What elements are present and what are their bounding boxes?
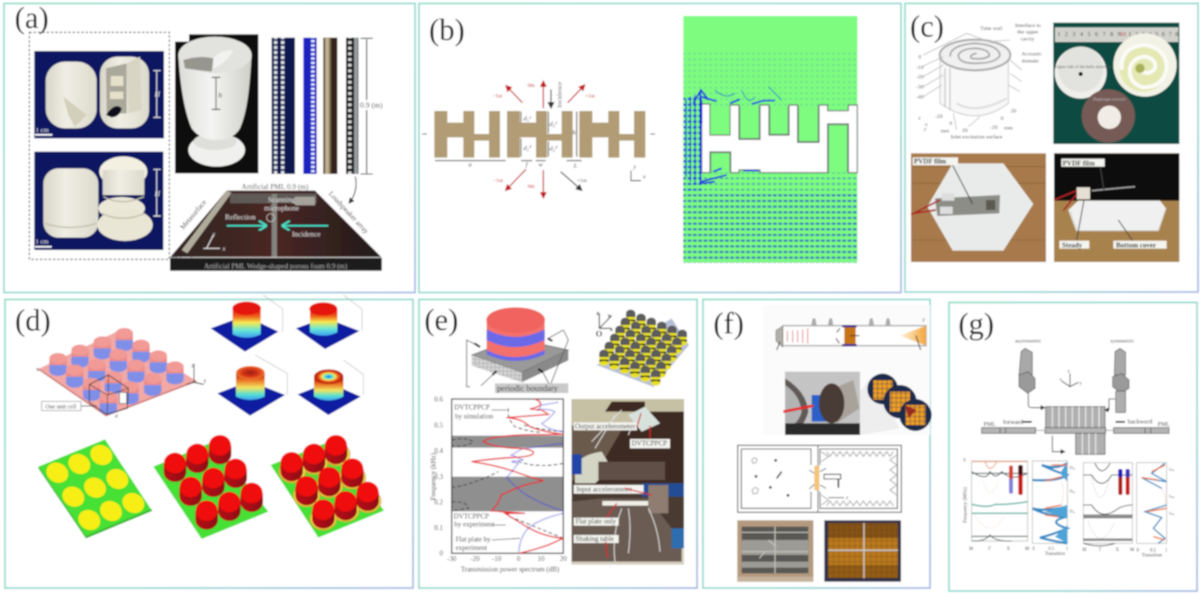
- dimension marks: [422, 112, 655, 169]
- label (a): (a): [15, 1, 49, 35]
- photo: stacked cylinder bottom: 1 cm: [35, 238, 49, 245]
- symmetric unit: [1105, 338, 1135, 413]
- photo: PVDF film side view: PVDF film: [1063, 159, 1095, 167]
- spiral schematic: mm: [1004, 125, 1013, 131]
- waveguide photo: Artificial PML 0.9 (m): [242, 182, 309, 191]
- transmission chart 2: 0.5: [1150, 549, 1156, 554]
- light background of figure: [763, 305, 930, 435]
- mode shape 3: [217, 355, 287, 416]
- mode shape 2: [296, 295, 362, 349]
- photo: PVDF film on hexagon: PVDF film: [914, 158, 946, 166]
- waveguide with resonator comb: backward: [1128, 419, 1153, 426]
- transmission chart 2: 1: [1165, 549, 1168, 554]
- chart labels: 10: [538, 555, 545, 563]
- band chart left: M: [969, 547, 973, 552]
- dimension marks: d₂ᵘ: [549, 121, 558, 128]
- dimension: 0.9 m: [359, 38, 385, 174]
- asymmetric unit: [1015, 338, 1044, 408]
- curves: [452, 399, 563, 553]
- spiral schematic: -40: [916, 95, 924, 101]
- mode shape 4: [298, 360, 363, 415]
- experiment photos: DVTCPPCP: [632, 440, 667, 448]
- diffraction arrows and order labels: 0th: [528, 83, 535, 89]
- spiral schematic: domain: [1022, 59, 1039, 65]
- grating cross section: [434, 111, 645, 158]
- experiment photos: Flat plate only: [576, 518, 617, 526]
- waveguide photo: Loudspeaker array: [327, 189, 371, 236]
- pink pillared plate: [36, 328, 206, 420]
- plate with red pillars: [153, 435, 268, 539]
- plate with red pillars and rings: [271, 435, 384, 538]
- photo: hollow cylinder top: [34, 51, 164, 138]
- label (d): (d): [15, 304, 51, 338]
- waveguide photo: [170, 182, 382, 271]
- dimension marks: a: [468, 162, 472, 169]
- chart labels: 0: [517, 555, 521, 563]
- label (f): (f): [713, 307, 744, 341]
- waveguide photo: Artificial PML Wedge-shaped porous foam 0.9 (m): [204, 262, 348, 270]
- axis y x: [631, 164, 646, 181]
- chart labels: -20: [470, 555, 480, 563]
- diffraction arrows and order labels: 0th: [528, 184, 535, 190]
- pink pillared plate: One unit cell: [45, 404, 77, 410]
- chart labels: Flat plate by: [456, 535, 491, 543]
- experiment photos: [572, 399, 684, 564]
- pink pillared plate: x: [36, 367, 39, 373]
- spiral schematic: [916, 22, 1042, 140]
- chart labels: 0.4: [434, 447, 444, 455]
- photo: hollow cylinder top: 1 cm: [36, 127, 50, 134]
- spiral schematic: mm: [941, 129, 950, 135]
- curved arrow from strip to waveguide photo: [349, 177, 356, 203]
- photo: white resonator cup: h: [218, 90, 222, 99]
- chamber photo right: [824, 520, 901, 582]
- strip photos: loudspeaker arrays: [272, 38, 358, 174]
- duct schematic: [776, 318, 926, 350]
- photo: spiral parts with ruler: Diaphragm structure: [1093, 97, 1126, 102]
- dimension marks: w: [538, 162, 543, 169]
- experiment photos: Shaking table: [576, 535, 614, 543]
- diffraction arrows and order labels: +1st: [585, 93, 595, 99]
- pink pillared plate: y: [203, 378, 206, 384]
- transmission chart 2: [1137, 463, 1175, 559]
- chart labels: 0.6: [434, 396, 444, 404]
- dimension marks: L: [573, 162, 578, 169]
- chart labels: DVTCPPCP: [454, 512, 489, 520]
- photo: spiral parts with ruler: Upper side of the helix structure: [1055, 64, 1111, 69]
- transmission chart 1: 0: [1032, 547, 1035, 552]
- chart labels: 0.3: [434, 473, 444, 481]
- array of yellow-black pillars: O: [596, 329, 603, 339]
- axis: z: [1068, 370, 1070, 375]
- transmission chart 2: fₛₑₐ: [1169, 510, 1175, 515]
- dimension: 0.9 m: 0.9 (m): [360, 101, 383, 110]
- chart labels: 0.1: [434, 524, 444, 532]
- spiral schematic: y: [923, 127, 927, 133]
- band chart left: 6: [963, 459, 966, 464]
- chart labels: 0.2: [434, 499, 444, 507]
- rig photo: [783, 372, 900, 435]
- transmission chart 2: fₛₑₐ: [1169, 494, 1175, 499]
- sample discs: [867, 374, 931, 431]
- chart labels: by experiment: [454, 521, 495, 529]
- duct schematic: z: [921, 318, 925, 324]
- photo: PVDF film on hexagon: [911, 153, 1046, 262]
- spiral schematic: -30: [916, 85, 924, 91]
- chart labels: -10: [492, 555, 502, 563]
- transmission chart 1: Dᵢ₂: [1070, 488, 1075, 493]
- band chart left: M: [1025, 547, 1029, 552]
- transmission chart 1: Dᵢ₁: [1070, 508, 1075, 513]
- axis: x: [1060, 378, 1063, 383]
- diffraction arrows and order labels: −1st: [492, 93, 503, 99]
- diffraction arrows and order labels: [492, 82, 595, 197]
- chamber photo left: [737, 520, 813, 582]
- transmission chart 2: 0: [1137, 549, 1140, 554]
- plate with yellow discs: [38, 439, 152, 538]
- axis: [1060, 370, 1082, 387]
- transmission chart 1: [1032, 461, 1075, 557]
- band chart right: [1082, 463, 1134, 553]
- spiral schematic: Tube wall: [980, 26, 1003, 32]
- label (c): (c): [910, 10, 944, 44]
- panel f: duct and chamber measurements: [703, 300, 931, 588]
- waveguide photo: Reflection: [225, 212, 256, 221]
- spiral schematic: 20: [962, 128, 968, 134]
- band chart right: M: [1130, 548, 1134, 553]
- meshed pillar unit cell: [467, 307, 568, 393]
- field plot: [683, 16, 857, 263]
- pink pillared plate: z: [191, 364, 194, 370]
- transmission chart 1: 1: [1066, 547, 1069, 552]
- asymmetric unit: asymmetric: [1015, 338, 1042, 344]
- spiral schematic: Interface to: [1015, 22, 1041, 29]
- chart labels: experiment: [456, 544, 487, 552]
- photo: spiral parts with ruler: 10: [1120, 32, 1126, 38]
- dimension marks: h: [572, 129, 576, 136]
- transmission chart 2: fₛₑₐ: [1169, 467, 1175, 472]
- axis y x: y: [632, 164, 636, 170]
- waveguide photo: microphone: [264, 204, 299, 213]
- diffraction arrows and order labels: Incidence: [557, 82, 564, 108]
- mode shape 1: [211, 295, 283, 352]
- spiral schematic: z: [917, 115, 921, 121]
- panel a: acoustic metasurface samples: [4, 1, 415, 292]
- chart labels: [430, 396, 567, 574]
- photo: stacked cylinder bottom: [34, 152, 163, 250]
- meshed pillar unit cell: periodic boundary: [497, 384, 559, 393]
- panel d: pillared plates and mode shapes: [5, 295, 413, 588]
- diffraction arrows and order labels: −1st: [493, 178, 503, 184]
- transmission chamber schematic: [738, 445, 901, 512]
- chart labels: 0.5: [434, 421, 444, 429]
- spiral schematic: -20: [935, 114, 943, 120]
- photo: spiral parts with ruler: 1 2 3 4 5 6 7 8 9: [1057, 32, 1121, 38]
- dashed box around unit cell photos: [29, 32, 169, 259]
- panel c: spiral resonator and PVDF photos: [905, 4, 1198, 292]
- label (b): (b): [429, 13, 465, 47]
- axis y x: x: [642, 174, 646, 180]
- spiral schematic: 0: [918, 55, 921, 61]
- waveguide photo: Metasurface: [178, 198, 208, 231]
- spiral schematic: -20: [916, 75, 924, 81]
- spiral schematic: 20: [1011, 109, 1016, 115]
- waveguide with resonator comb: PML: [1158, 422, 1170, 428]
- chart labels: Frequency (kHz): [430, 452, 438, 500]
- waveguide photo: 32 (mm): [172, 256, 192, 263]
- photo: hollow cylinder top: H: [154, 90, 161, 99]
- dimension marks: d₂ᵈ: [549, 146, 558, 153]
- label (g): (g): [958, 307, 994, 341]
- axis: y: [1079, 381, 1082, 386]
- transmission chamber schematic: z: [845, 495, 848, 501]
- photo: white resonator cup: [175, 33, 258, 173]
- photo: spiral parts with ruler: [1053, 23, 1179, 144]
- waveguide with resonator comb: forward: [1003, 419, 1024, 426]
- spiral schematic: 0: [949, 121, 952, 127]
- spiral schematic: Inlet excitation surface: [951, 133, 1003, 140]
- band chart left: Frequency (MHz): [964, 487, 969, 523]
- waveguide with resonator comb: PML: [984, 422, 996, 428]
- array of yellow-black pillars: x: [610, 326, 614, 333]
- spiral schematic: the upper: [1017, 30, 1039, 36]
- panel b: grating unit and field plot: [419, 4, 901, 292]
- photo: PVDF film side view: Bottom cover: [1116, 241, 1156, 249]
- chart labels: Transmission power spectrum (dB): [461, 566, 560, 574]
- panel g: asymmetric and symmetric resonators: [949, 302, 1197, 591]
- transmission chart 1: Dᵢ₃: [1070, 465, 1075, 470]
- transmission chart 1: 0.5: [1048, 547, 1055, 552]
- transmission chart 1: Transition: [1045, 552, 1066, 557]
- photo: spiral parts with ruler: 1 2 3 4 5 6 7 8: [1128, 32, 1178, 38]
- label (e): (e): [424, 303, 458, 337]
- band chart left: Γ: [988, 547, 991, 552]
- chart labels: by simulation: [455, 413, 494, 421]
- pink pillared plate: a: [115, 414, 118, 420]
- transmission chart 2: Transition: [1142, 554, 1162, 559]
- waveguide photo: y: [212, 232, 216, 238]
- chart labels: -30: [447, 555, 457, 563]
- waveguide photo: Incidence: [292, 229, 320, 238]
- dimension marks: f: [526, 162, 529, 169]
- photo: PVDF film side view: [1054, 153, 1179, 262]
- spiral schematic: -10: [916, 65, 924, 71]
- waveguide with resonator comb: [982, 407, 1170, 454]
- photo: stacked cylinder bottom: H: [154, 189, 161, 198]
- photo: PVDF film side view: Steady: [1062, 241, 1083, 249]
- array of yellow-black pillars: y: [608, 313, 612, 320]
- band chart right: M: [1082, 548, 1086, 553]
- experiment photos: Input accelerometer: [576, 485, 633, 493]
- dimension marks: d₁ᵘ: [523, 116, 532, 123]
- spiral schematic: 0: [1001, 116, 1004, 122]
- experiment photos: Output accelerometer: [575, 422, 636, 430]
- diffraction arrows and order labels: +1st: [577, 178, 587, 184]
- waveguide photo: Scanning: [268, 195, 296, 204]
- panel e: DVTCPPCP experiment: [419, 300, 697, 588]
- symmetric unit: symmetric: [1110, 338, 1135, 344]
- array of yellow-black pillars: z: [596, 310, 599, 317]
- spiral schematic: -20: [990, 125, 998, 131]
- array of yellow-black pillars: [596, 310, 689, 387]
- chart labels: 20: [560, 555, 567, 563]
- spiral schematic: Acoustic: [1022, 51, 1042, 57]
- chart labels: DVTCPPCP: [454, 404, 490, 412]
- dimension marks: d₁ᵈ: [523, 145, 532, 152]
- band chart right: X: [1116, 548, 1120, 553]
- spiral schematic: cavity: [1021, 37, 1035, 43]
- band chart left: X: [1007, 547, 1011, 552]
- band chart left: [963, 459, 1029, 552]
- waveguide photo: x: [222, 247, 226, 253]
- chart labels: 0: [439, 550, 443, 558]
- spiral schematic: x: [924, 122, 928, 128]
- band chart right: Γ: [1099, 548, 1102, 553]
- transmission chart: [430, 396, 567, 574]
